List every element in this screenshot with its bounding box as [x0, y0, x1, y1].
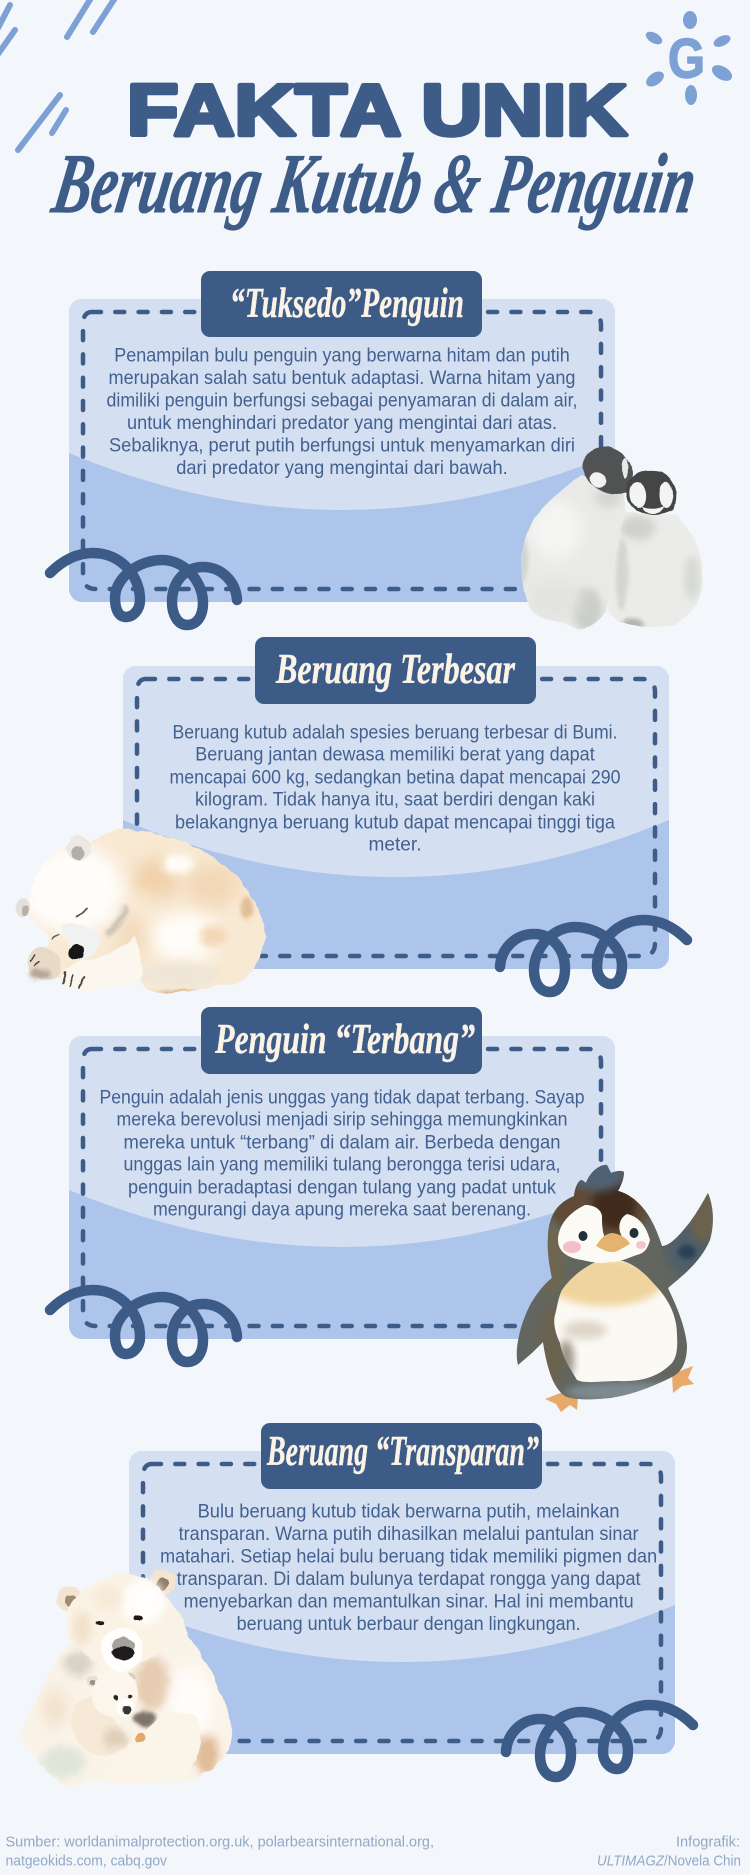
infographic credit: ULTIMAGZ/Novela Chin	[597, 1853, 741, 1869]
body text: mencapai 600 kg, sedangkan betina dapat mencapai 290	[170, 766, 621, 788]
body text: dimiliki penguin berfungsi sebagai penyamaran di dalam air,	[106, 390, 578, 412]
decorative spiral	[500, 920, 687, 992]
body text: Beruang kutub adalah spesies beruang terbesar di Bumi.	[172, 721, 618, 743]
logo: sun with letter G	[643, 11, 735, 105]
decorative spiral	[506, 1705, 693, 1777]
body text: merupakan salah satu bentuk adaptasi. Warna hitam yang	[108, 367, 576, 389]
panel: Beruang Transparan	[20, 1423, 693, 1786]
heading banner	[201, 1007, 482, 1074]
body text: meter.	[368, 834, 422, 856]
body text: belakangnya beruang kutub dapat mencapai tinggi tiga	[175, 811, 615, 833]
body text: kilogram. Tidak hanya itu, saat berdiri dengan kaki	[195, 789, 595, 811]
infographic credit	[597, 1835, 741, 1869]
source credit: natgeokids.com, cabq.gov	[6, 1853, 168, 1869]
body text: dari predator yang mengintai dari bawah.	[176, 457, 508, 479]
body text	[160, 1500, 657, 1635]
logo: sun with letter G: G	[668, 26, 705, 90]
body text: matahari. Setiap helai bulu beruang tidak memiliki pigmen dan	[160, 1545, 657, 1567]
title: FAKTA UNIK	[127, 71, 627, 151]
heading banner	[201, 271, 482, 337]
decorative spiral	[50, 1290, 237, 1362]
heading banner: Beruang Terbesar	[275, 647, 515, 693]
body text	[170, 721, 621, 856]
body text: Sebaliknya, perut putih berfungsi untuk menyamarkan diri	[109, 435, 575, 457]
body text: beruang untuk berbaur dengan lingkungan.	[237, 1613, 581, 1635]
decorative spiral	[50, 553, 237, 625]
body text: transparan. Di dalam bulunya terdapat rongga yang dapat	[177, 1568, 641, 1590]
heading banner: “Tuksedo”Penguin	[230, 281, 464, 327]
body text: menyebarkan dan memantulkan sinar. Hal ini membantu	[184, 1590, 634, 1612]
body text: Bulu beruang kutub tidak berwarna putih, melainkan	[198, 1500, 620, 1522]
heading banner	[255, 637, 536, 704]
panel: Tuksedo Penguin	[50, 271, 702, 632]
body text: transparan. Warna putih dihasilkan melalui pantulan sinar	[179, 1523, 639, 1545]
body text	[106, 345, 578, 479]
illustration: waving penguin	[517, 1163, 714, 1412]
heading banner: Penguin “Terbang”	[214, 1017, 475, 1063]
body text: Penampilan bulu penguin yang berwarna hitam dan putih	[114, 345, 570, 367]
infographic credit: Infografik:	[676, 1835, 740, 1851]
body text: penguin beradaptasi dengan tulang yang padat untuk	[128, 1176, 556, 1198]
body text: Penguin adalah jenis unggas yang tidak dapat terbang. Sayap	[100, 1086, 585, 1108]
body text: mereka untuk “terbang” di dalam air. Berbeda dengan	[124, 1131, 560, 1153]
panel: Penguin Terbang	[50, 1007, 714, 1412]
body text: mengurangi daya apung mereka saat berenang.	[153, 1199, 531, 1221]
source credit	[6, 1835, 434, 1869]
body text: unggas lain yang memiliki tulang berongga terisi udara,	[124, 1154, 560, 1176]
panel: Beruang Terbesar	[17, 637, 687, 999]
body text: mereka berevolusi menjadi sirip sehingga memungkinkan	[116, 1109, 568, 1131]
heading banner: Beruang “Transparan”	[266, 1429, 539, 1475]
title	[46, 71, 703, 231]
illustration: sleeping polar bear	[17, 828, 265, 999]
illustration: two penguins	[518, 447, 702, 632]
illustration: polar bear with cub	[20, 1569, 232, 1786]
heading banner	[261, 1423, 542, 1489]
body text: untuk menghindari predator yang mengintai dari atas.	[127, 412, 557, 434]
body text	[100, 1086, 585, 1221]
decorative slashes top left	[0, 0, 115, 150]
body text: Beruang jantan dewasa memiliki berat yang dapat	[195, 744, 595, 766]
source credit: Sumber: worldanimalprotection.org.uk, polarbearsinternational.org,	[6, 1835, 434, 1851]
